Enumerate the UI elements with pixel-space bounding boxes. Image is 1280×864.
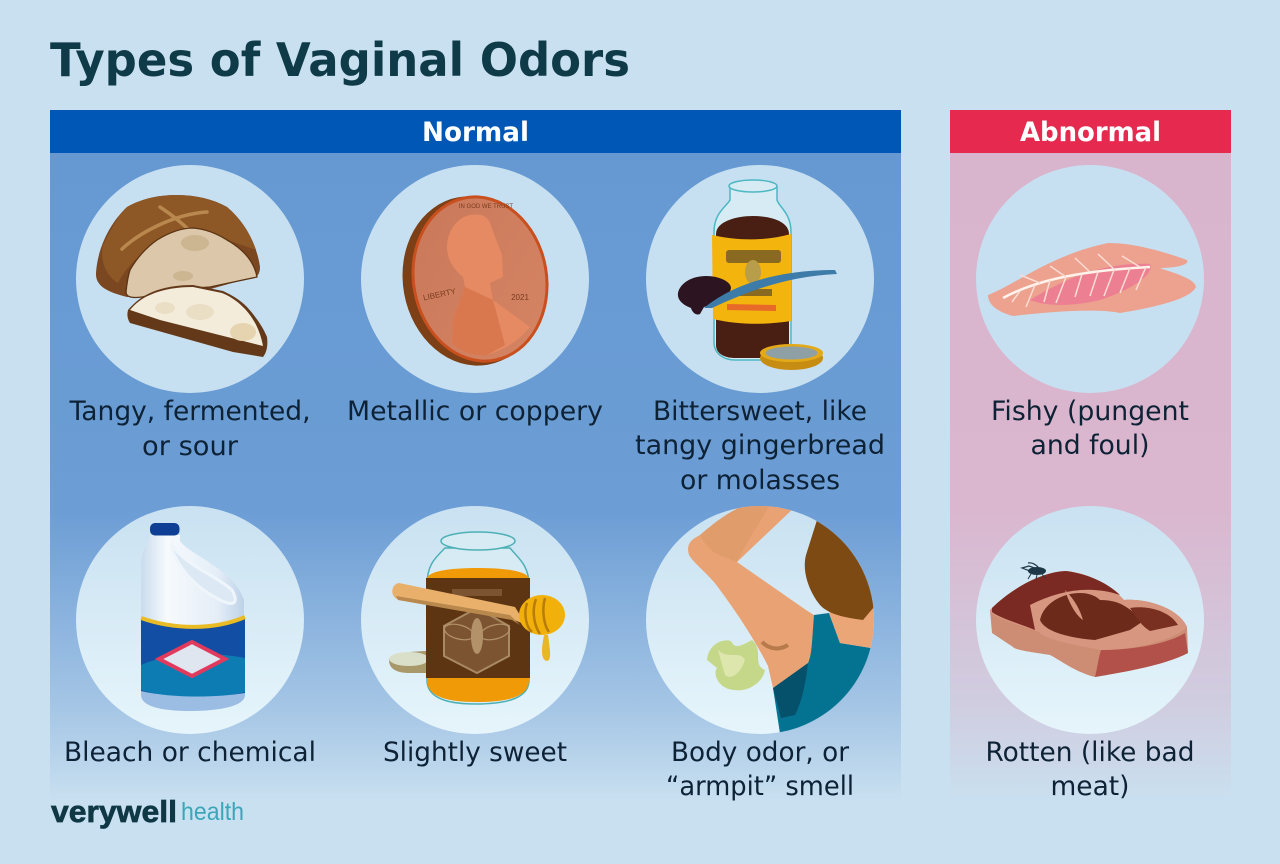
label: bittersweet: or molasses bbox=[680, 465, 840, 496]
icon: lid bbox=[760, 344, 823, 370]
item: fish bbox=[976, 165, 1204, 461]
panel: abnormal bbox=[950, 110, 1231, 803]
label: body odor: Body odor, or bbox=[671, 737, 849, 768]
item: meat bbox=[976, 506, 1204, 802]
label: tangy: Tangy, fermented, bbox=[69, 396, 310, 427]
label: bittersweet bbox=[635, 396, 885, 496]
label: tangy bbox=[69, 396, 310, 462]
panel: normal bbox=[50, 110, 901, 803]
item: penny bbox=[347, 165, 603, 427]
item: bread bbox=[69, 165, 310, 462]
item: bleach bbox=[64, 506, 316, 768]
logo: verywell health: verywell bbox=[51, 794, 177, 829]
label: body odor: “armpit” smell bbox=[666, 771, 854, 802]
icon: penny bbox=[389, 184, 562, 377]
header: abnormal: Abnormal bbox=[1020, 117, 1161, 148]
icon: rotten meat bbox=[990, 563, 1188, 677]
icon: honey jar bbox=[389, 532, 565, 704]
icon: hair bbox=[805, 520, 880, 620]
label: bittersweet: tangy gingerbread bbox=[635, 430, 885, 461]
icon: odor cloud bbox=[707, 640, 765, 690]
icon: fly bbox=[1022, 563, 1046, 579]
label: bleach: Bleach or chemical bbox=[64, 737, 316, 768]
label: bittersweet: Bittersweet, like bbox=[653, 396, 867, 427]
label: fishy: and foul) bbox=[1030, 430, 1150, 461]
icon: penny: 2021 bbox=[511, 293, 529, 302]
label: rotten bbox=[986, 737, 1194, 802]
header: normal: Normal bbox=[422, 117, 529, 148]
label: body odor bbox=[666, 737, 854, 802]
icon: armpit bbox=[688, 500, 880, 740]
label: sweet: Slightly sweet bbox=[383, 737, 567, 768]
icon: bleach bottle bbox=[141, 523, 245, 711]
item: armpit bbox=[646, 500, 880, 802]
label: tangy: or sour bbox=[142, 431, 238, 462]
title: Types of Vaginal Odors bbox=[50, 33, 630, 87]
icon: fish fillet bbox=[988, 243, 1196, 316]
item: honey bbox=[361, 506, 589, 768]
icon: molasses jar bbox=[678, 180, 837, 370]
icon: bread bbox=[96, 195, 267, 357]
icon: tank top bbox=[773, 613, 870, 732]
label: fishy: Fishy (pungent bbox=[991, 396, 1189, 427]
icon: penny: LIBERTY bbox=[422, 287, 457, 302]
label: rotten: Rotten (like bad bbox=[986, 737, 1194, 768]
icon: penny: IN GOD WE TRUST bbox=[459, 204, 513, 210]
logo: verywell health bbox=[51, 794, 244, 829]
logo: verywell health: health bbox=[181, 798, 244, 826]
icon: shoulder bbox=[829, 594, 874, 648]
icon: arm bbox=[688, 500, 814, 688]
header: abnormal bbox=[950, 110, 1231, 153]
header: normal bbox=[50, 110, 901, 153]
icon: honey lid bbox=[389, 651, 430, 673]
label: fishy bbox=[991, 396, 1189, 461]
label: metallic: Metallic or coppery bbox=[347, 396, 603, 427]
item: molasses bbox=[635, 165, 885, 496]
label: rotten: meat) bbox=[1050, 771, 1130, 802]
